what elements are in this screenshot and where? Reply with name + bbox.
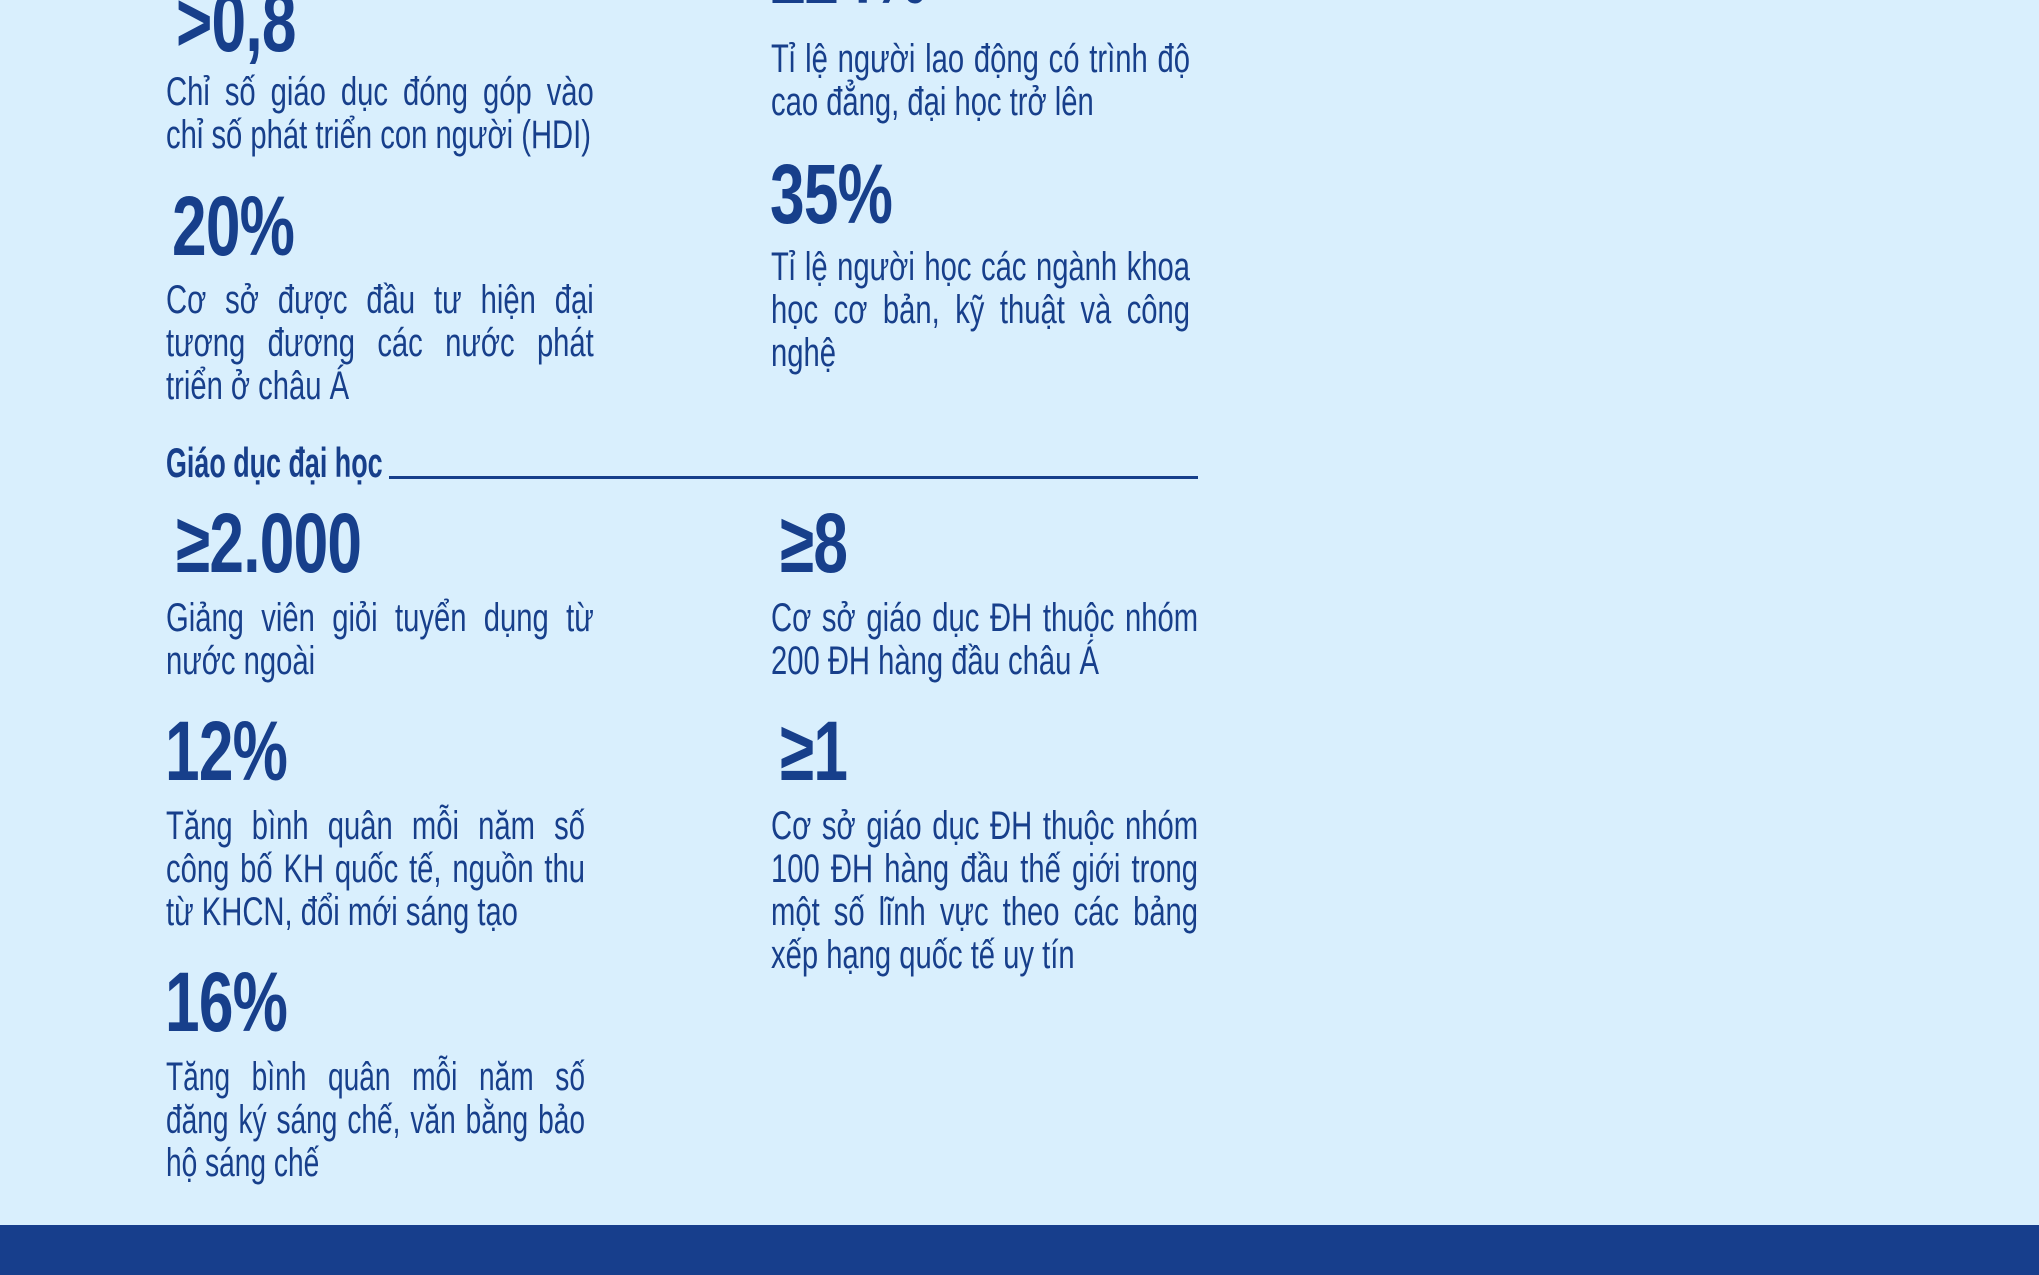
stat: 35%: 35%	[770, 147, 892, 241]
stat: ≥8: ≥8	[780, 496, 847, 590]
heading: Giáo dục đại học: Giáo dục đại học	[166, 439, 383, 486]
stat: ≥1: ≥1	[780, 704, 847, 798]
text: lecturers: Giảng viên giỏi tuyển dụng từ nước ngoài	[166, 596, 594, 683]
text: STEM: Tỉ lệ người học các ngành khoa học cơ bản, kỹ thuật và công nghệ	[771, 245, 1190, 375]
stat: 12%: 12%	[165, 704, 287, 798]
footer band	[0, 1225, 2039, 1275]
heading: Giáo dục đại học	[166, 439, 1198, 486]
text: HDI: Chỉ số giáo dục đóng góp vào chỉ số phát triển con người (HDI)	[166, 70, 594, 157]
text: publications: Tăng bình quân mỗi năm số công bố KH quốc tế, nguồn thu từ KHCN, đổi mới sáng tạo	[166, 804, 585, 934]
text: workforce: Tỉ lệ người lao động có trình độ cao đẳng, đại học trở lên	[771, 37, 1190, 124]
stat: 16%: 16%	[165, 955, 287, 1049]
stat: 20%: 20%	[172, 179, 294, 273]
text: patents: Tăng bình quân mỗi năm số đăng ký sáng chế, văn bằng bảo hộ sáng chế	[166, 1055, 585, 1185]
stat: ≥2.000: ≥2.000	[176, 496, 361, 590]
text: top 100 world: Cơ sở giáo dục ĐH thuộc nhóm 100 ĐH hàng đầu thế giới trong một số lĩnh vực theo các bảng xếp hạng quốc tế uy tín	[771, 804, 1198, 977]
text: modern facilities: Cơ sở được đầu tư hiện đại tương đương các nước phát triển ở châu Á	[166, 278, 594, 408]
text: top 200 Asia: Cơ sở giáo dục ĐH thuộc nhóm 200 ĐH hàng đầu châu Á	[771, 596, 1198, 683]
